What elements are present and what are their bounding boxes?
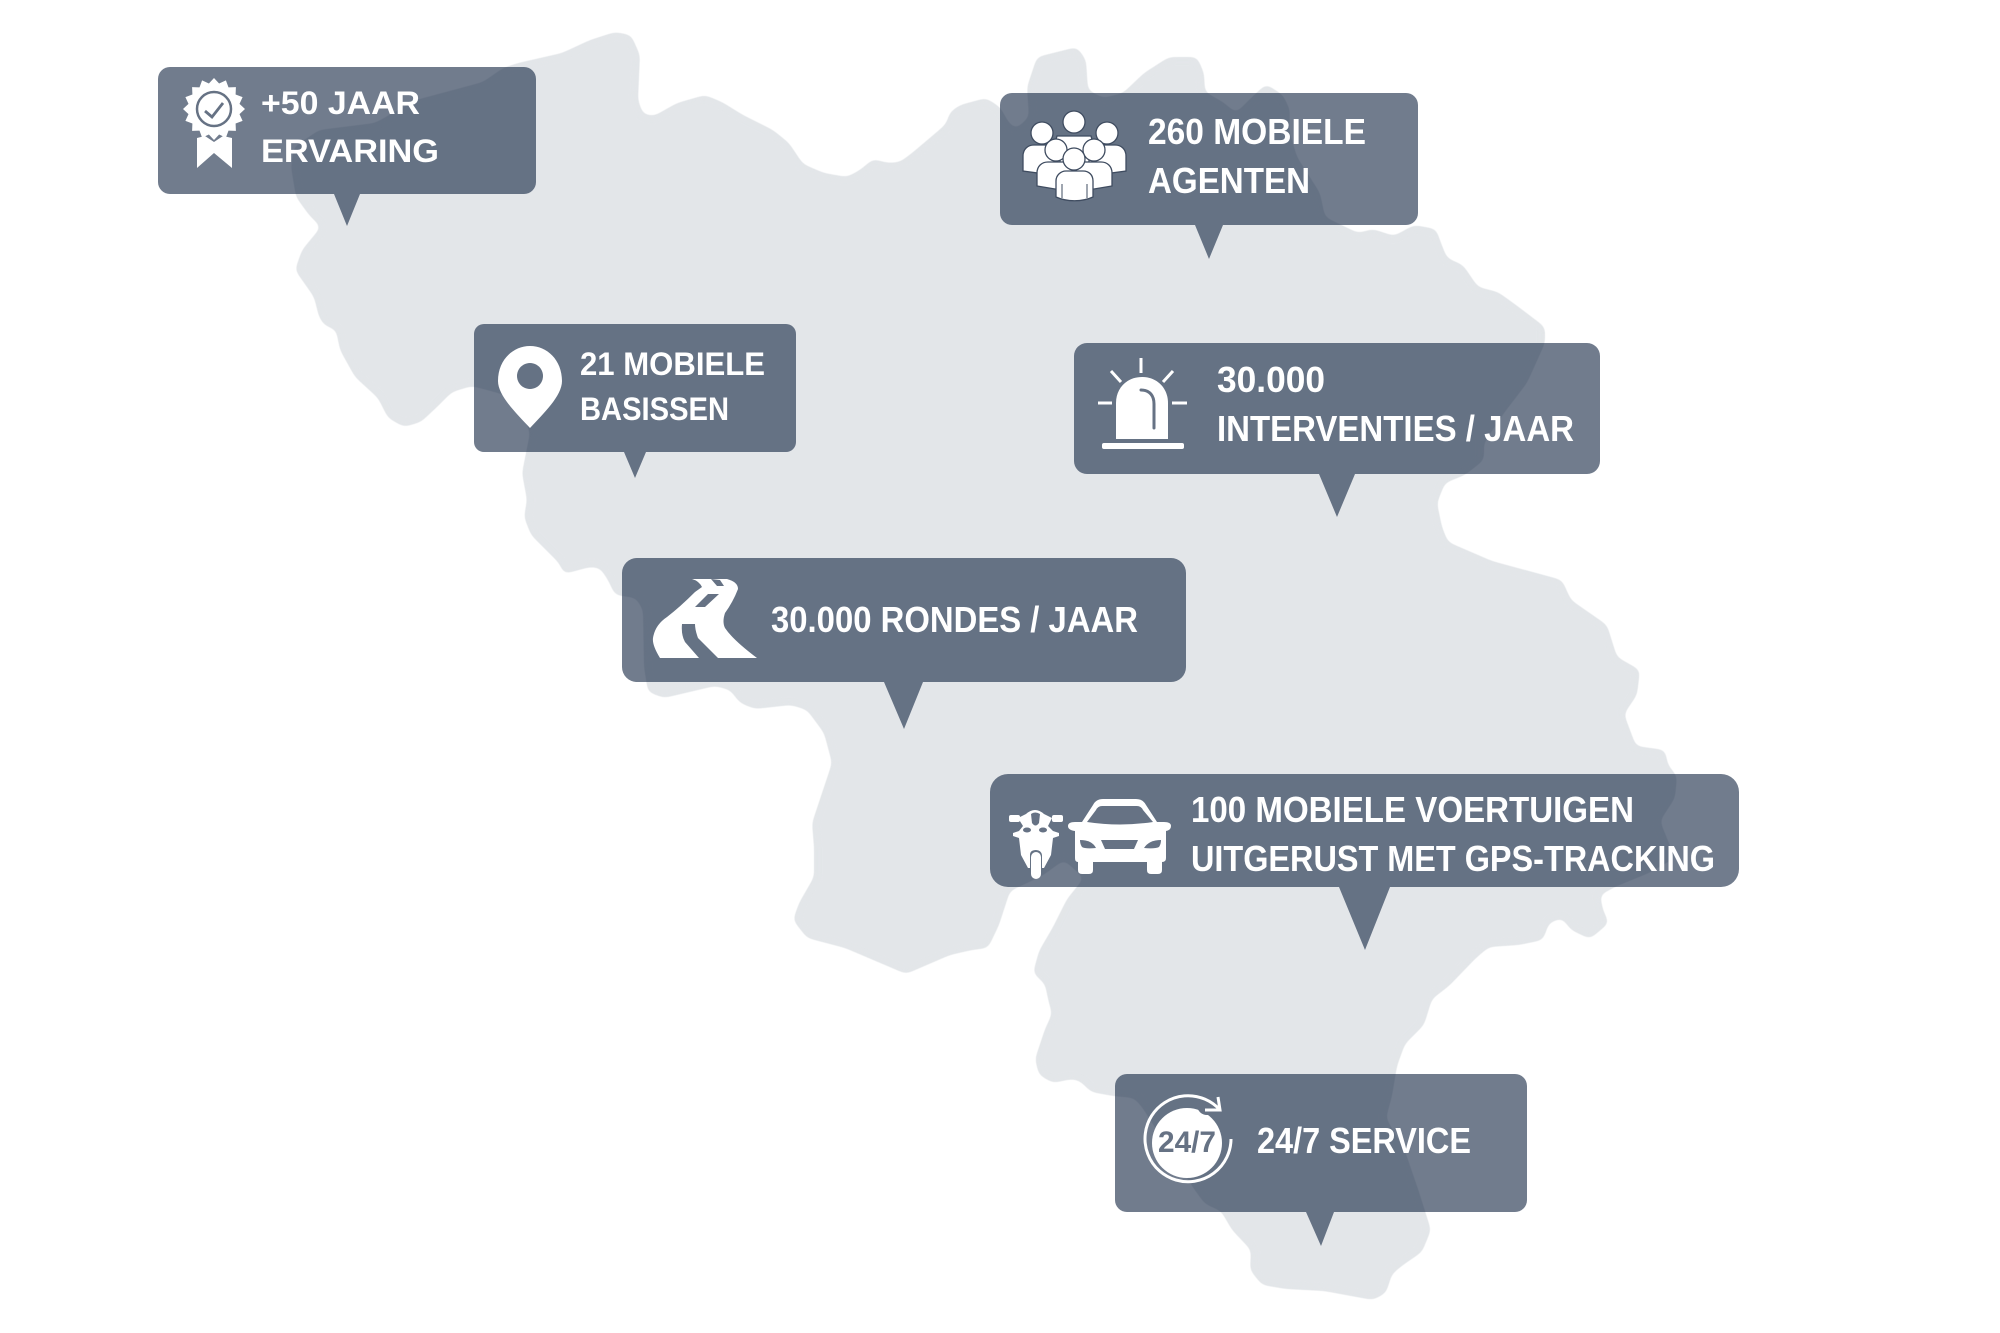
icon: location pin xyxy=(498,346,562,428)
icon: car xyxy=(1068,799,1171,874)
icon: group of people xyxy=(1023,111,1126,201)
bubble xyxy=(1000,93,1418,259)
text: +50 JAAR xyxy=(261,85,420,121)
icon: award ribbon xyxy=(183,78,245,168)
text: UITGERUST MET GPS-TRACKING xyxy=(1191,838,1715,879)
text: 24/7 SERVICE xyxy=(1257,1120,1471,1161)
icon: 24/7 clock: 24/7 xyxy=(1158,1126,1216,1159)
bubble xyxy=(622,558,1186,729)
text: BASISSEN xyxy=(580,391,729,427)
text: 100 MOBIELE VOERTUIGEN xyxy=(1191,789,1634,830)
map of Belgium silhouette xyxy=(291,32,1677,1300)
icon: winding road xyxy=(653,579,757,658)
bubble xyxy=(1115,1074,1527,1246)
icon: 24/7 clock xyxy=(1145,1095,1231,1182)
callout: 100 mobiele voertuigen met gps-tracking xyxy=(990,774,1739,950)
text: 21 MOBIELE xyxy=(580,346,765,382)
callout: 24/7 service xyxy=(1115,1074,1527,1246)
icon: motorcycle xyxy=(1009,810,1063,879)
callout: 30.000 rondes per jaar xyxy=(622,558,1186,729)
text: INTERVENTIES / JAAR xyxy=(1217,408,1574,449)
bubble xyxy=(990,774,1739,950)
text: AGENTEN xyxy=(1148,160,1310,201)
callout: 260 mobiele agenten xyxy=(1000,93,1418,259)
icon: siren xyxy=(1098,358,1187,449)
callout: 21 mobiele basissen xyxy=(474,324,796,478)
text: 260 MOBIELE xyxy=(1148,111,1366,152)
bubble xyxy=(1074,343,1600,517)
text: 30.000 RONDES / JAAR xyxy=(771,599,1138,640)
bubble xyxy=(474,324,796,478)
text: ERVARING xyxy=(261,133,439,169)
callout: 30.000 interventies per jaar xyxy=(1074,343,1600,517)
bubble xyxy=(158,67,536,226)
callout: +50 jaar ervaring xyxy=(158,67,536,226)
text: 30.000 xyxy=(1217,359,1325,400)
